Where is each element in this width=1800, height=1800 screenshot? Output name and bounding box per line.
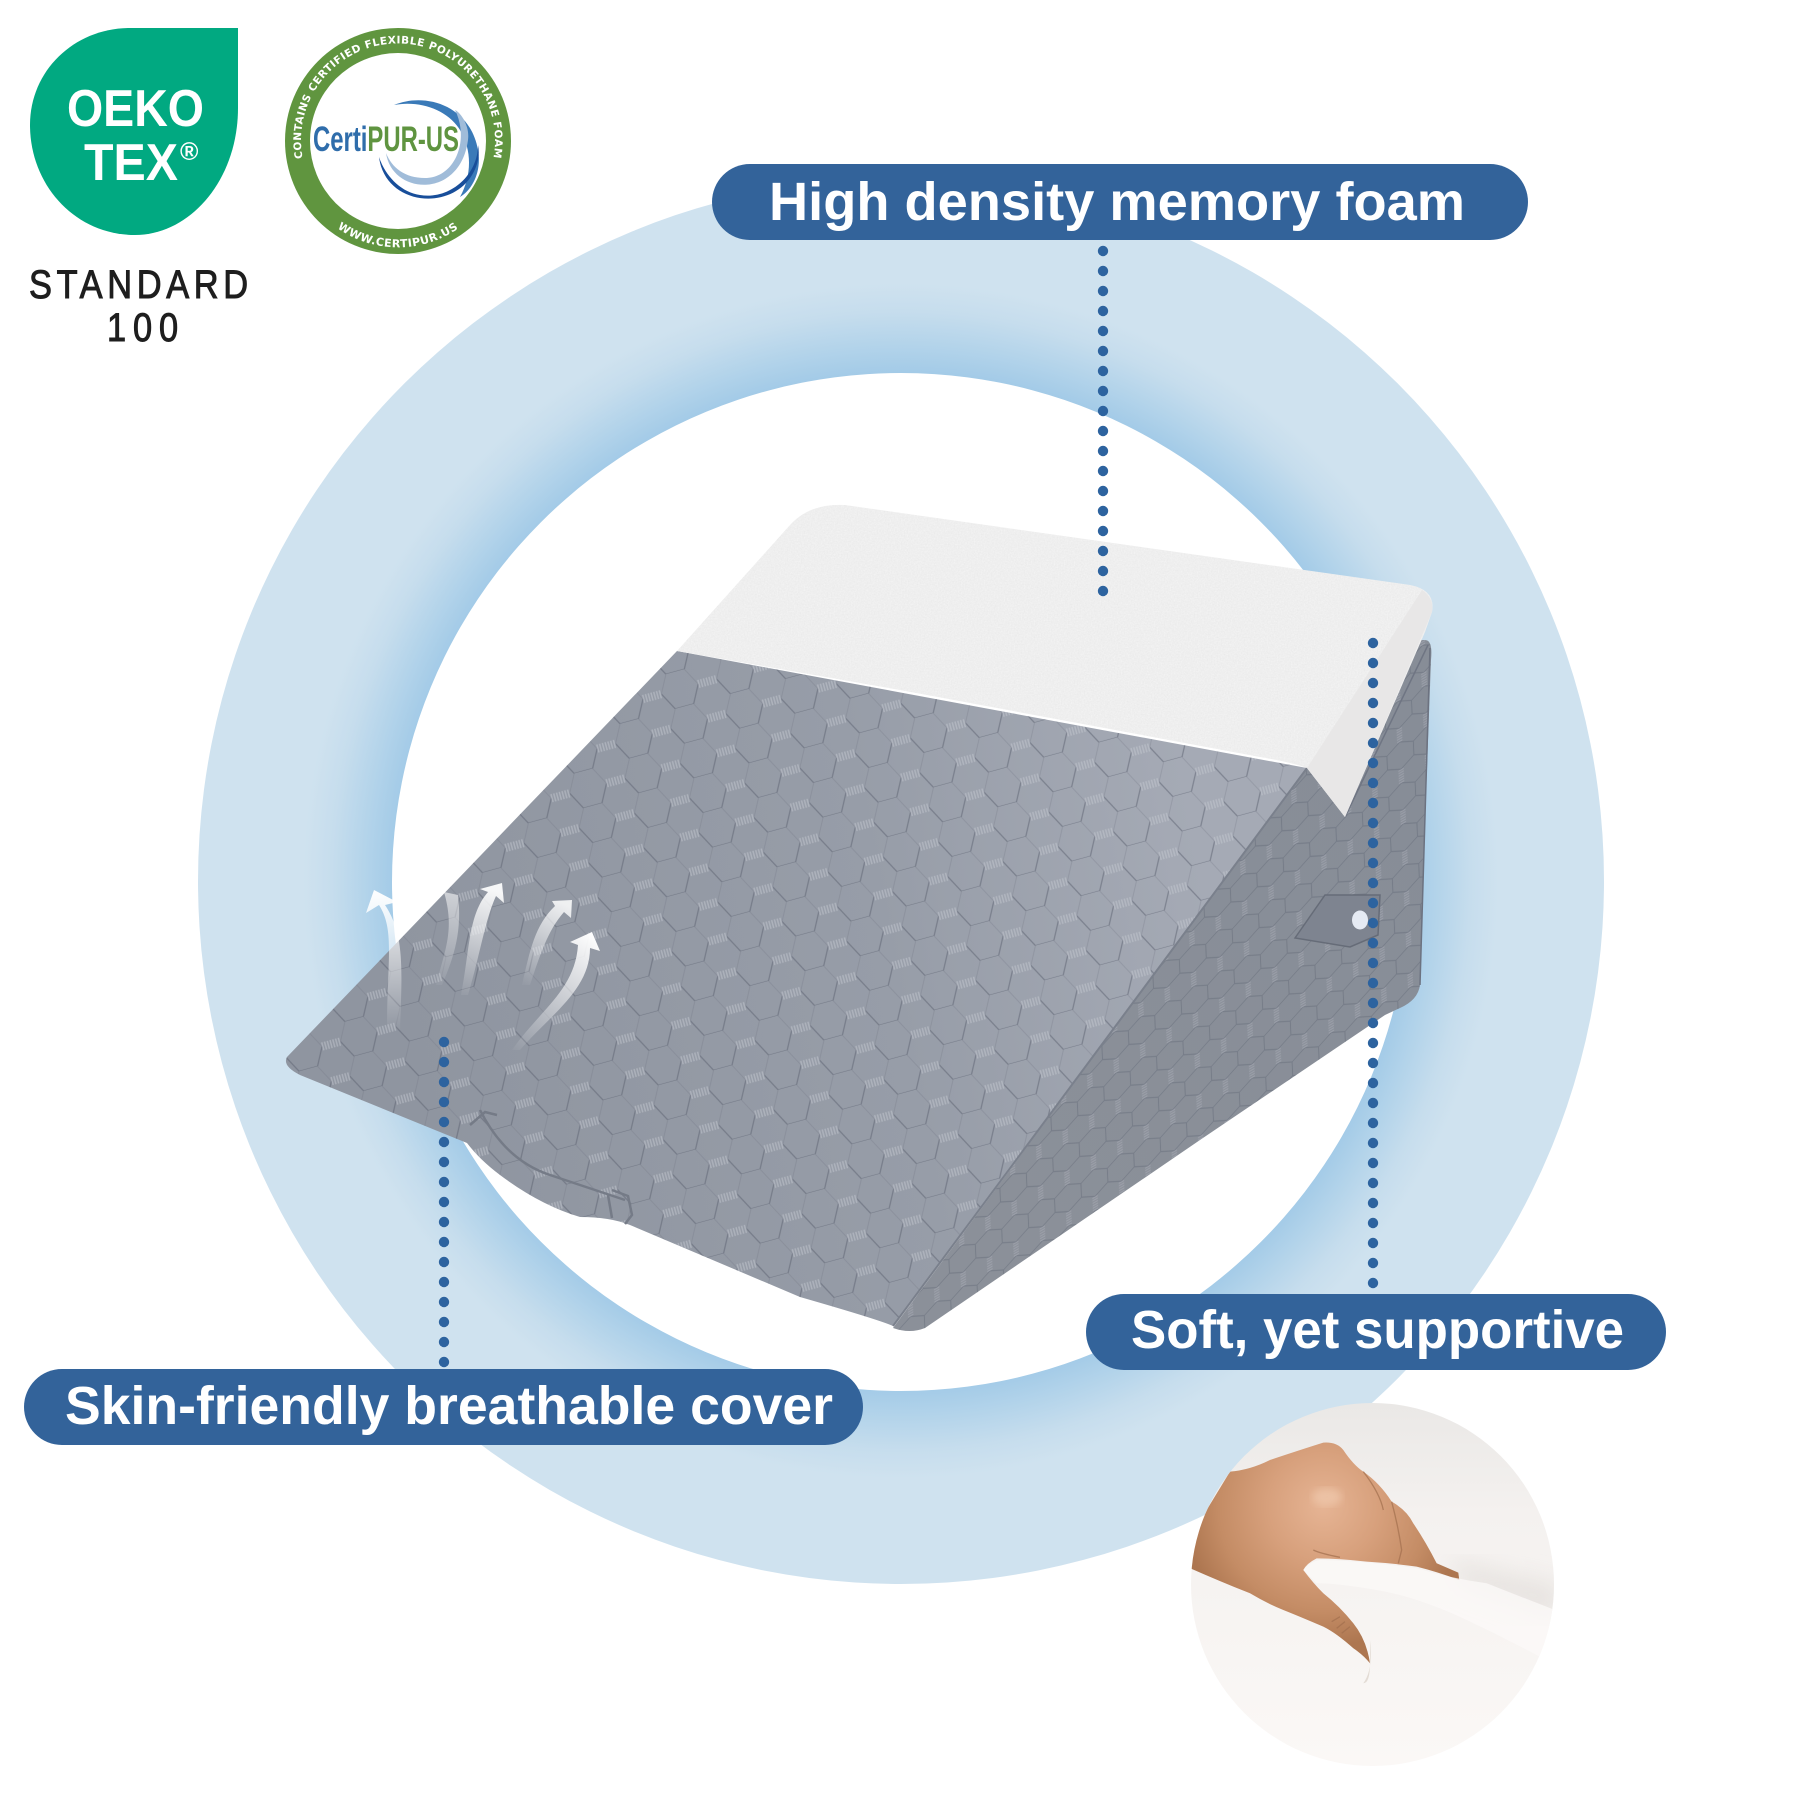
memory foam top layer — [677, 505, 1433, 817]
callout: soft yet supportive — [1086, 1294, 1666, 1370]
TEX word: TEX — [84, 134, 178, 192]
pillow side face — [893, 640, 1431, 1331]
seal ring text top: CONTAINS CERTIFIED FLEXIBLE POLYURETHANE FOAM — [293, 36, 503, 158]
dotted leader: breathable cover — [439, 1037, 449, 1367]
OEKO word: OEKO — [67, 80, 204, 138]
foam fold — [1304, 1570, 1552, 1624]
STANDARD label: STANDARD — [29, 262, 253, 307]
callout: skin-friendly breathable cover: Skin-friendly breathable cover — [65, 1376, 833, 1436]
hand — [1187, 1443, 1459, 1663]
side pocket with snap — [1295, 895, 1380, 947]
finger creases — [1313, 1472, 1402, 1633]
knuckle highlight — [1312, 1488, 1342, 1506]
photo: hand pressing memory foam — [1187, 1403, 1563, 1766]
green drop badge — [30, 28, 238, 235]
seal ring text bottom: WWW.CERTIPUR.US — [339, 222, 457, 248]
background ring with blue glow — [198, 178, 1604, 1584]
arrow 4 — [522, 900, 572, 985]
arrow 3 — [461, 883, 504, 995]
CertiPUR-US wordmark: CertiPUR-US — [313, 120, 459, 159]
100 label: 100 — [107, 305, 185, 350]
dotted leader: foam — [1098, 246, 1108, 596]
arrow 1 — [366, 890, 401, 1030]
dotted leader: soft yet supportive — [1368, 638, 1378, 1288]
foam shadow near fingertips — [1460, 1566, 1554, 1608]
callout: soft yet supportive: Soft, yet supportive — [1131, 1300, 1624, 1360]
airflow arrows — [366, 883, 600, 1050]
swoosh — [379, 100, 479, 199]
pillow front sloped face — [286, 651, 1307, 1326]
carry handle stitching — [470, 1110, 632, 1224]
wedge pillow product — [286, 505, 1433, 1331]
callout: high density memory foam: High density memory foam — [769, 172, 1465, 232]
arrow 5 — [512, 932, 600, 1050]
foam cut edge shading — [1307, 590, 1432, 817]
arrow 2 — [436, 892, 459, 985]
logo: CertiPUR-US seal — [285, 28, 511, 254]
logo: OEKO-TEX Standard 100 — [29, 28, 253, 350]
registered mark: ® — [180, 138, 199, 166]
callout: high density memory foam — [712, 164, 1528, 240]
